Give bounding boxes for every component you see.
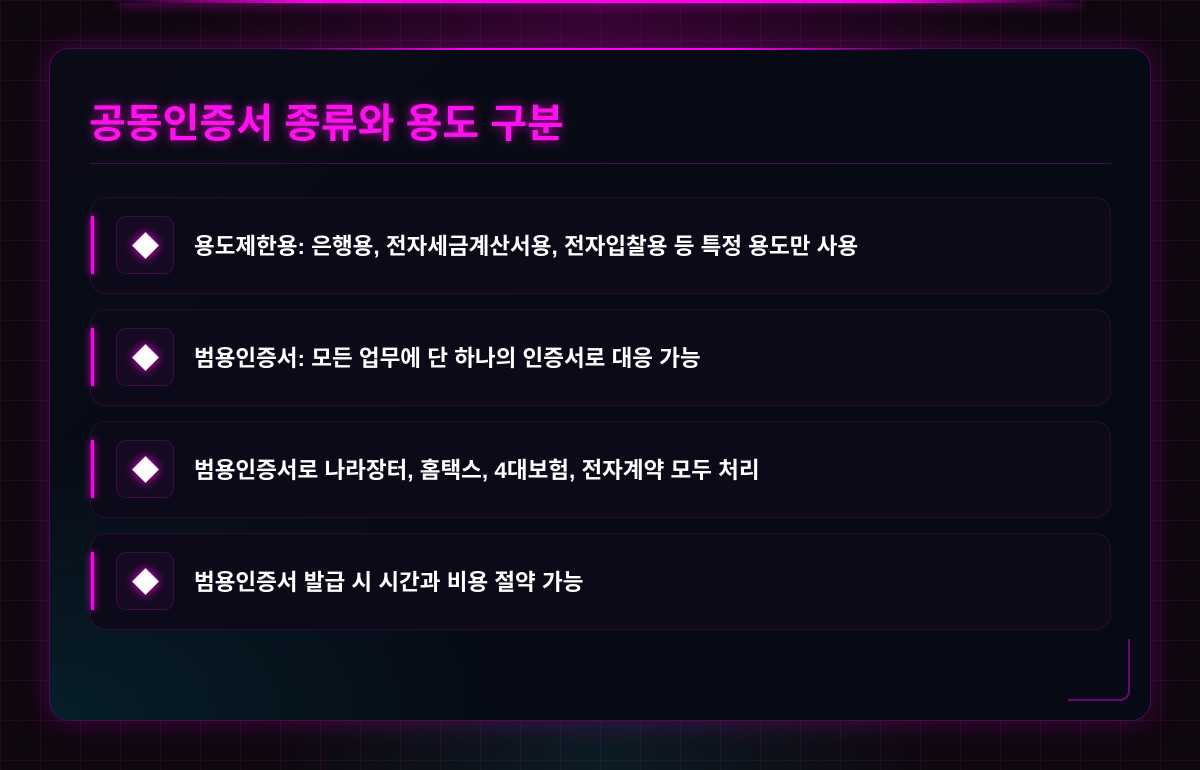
text 2: 범용인증서: 모든 업무에 단 하나의 인증서로 대응 가능 [194, 346, 701, 371]
item 1 [90, 197, 1111, 294]
icon: diamond [116, 552, 174, 610]
item 2 [90, 309, 1111, 406]
icon: diamond [116, 328, 174, 386]
text 4: 범용인증서 발급 시 시간과 비용 절약 가능 [194, 570, 583, 595]
text 1: 용도제한용: 은행용, 전자세금계산서용, 전자입찰용 등 특정 용도만 사용 [194, 234, 858, 259]
text 3: 범용인증서로 나라장터, 홈택스, 4대보험, 전자계약 모두 처리 [194, 458, 760, 483]
icon: diamond [116, 440, 174, 498]
title: 공동인증서 종류와 용도 구분 [89, 102, 564, 146]
item 4 [90, 533, 1111, 630]
icon: diamond [116, 216, 174, 274]
item 3 [90, 421, 1111, 518]
